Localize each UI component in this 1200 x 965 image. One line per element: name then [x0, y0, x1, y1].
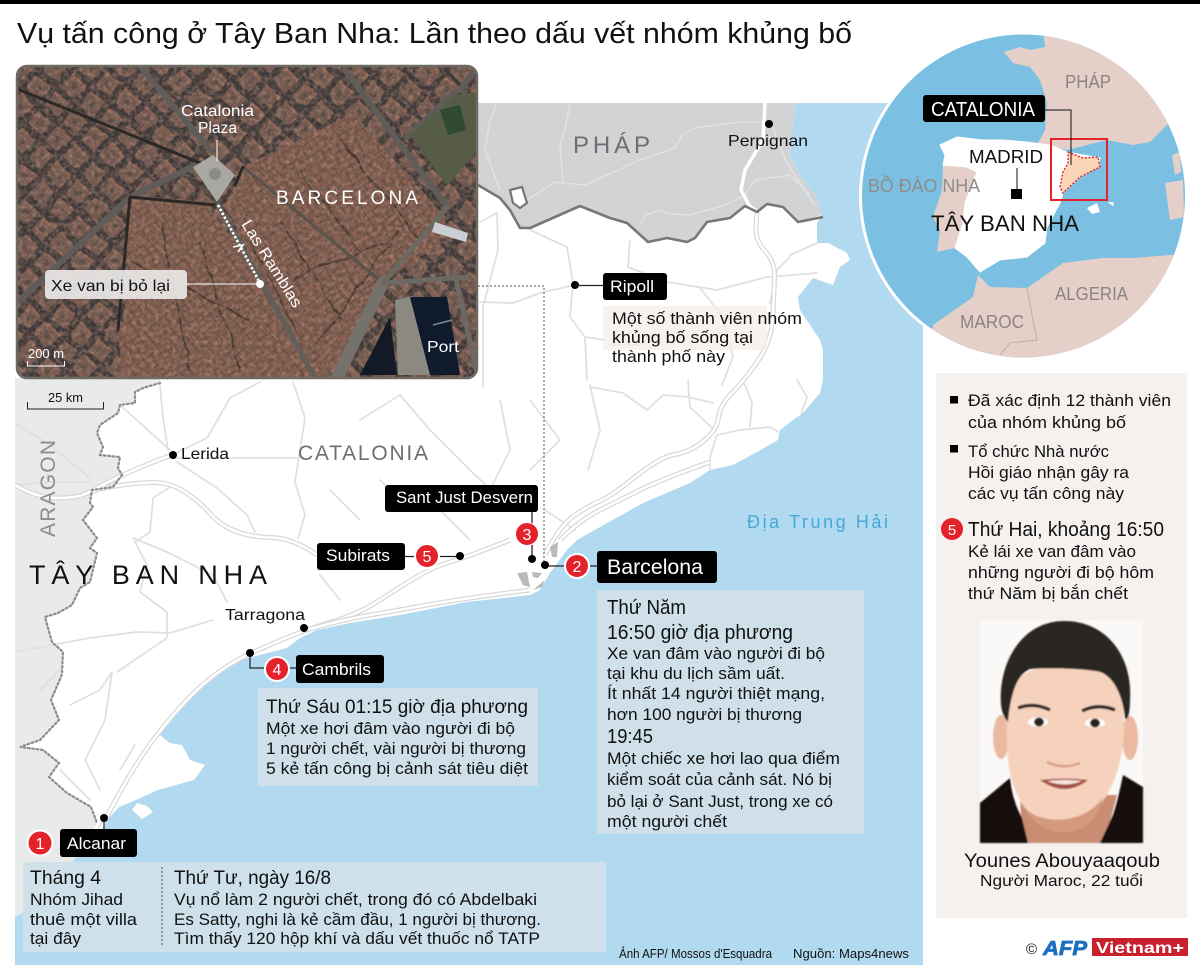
market roof — [432, 222, 468, 242]
neighbouring Spanish regions in grey — [15, 378, 160, 917]
logo: AFP and Vietnam+: © — [1026, 941, 1037, 958]
info box: Barcelona: Thứ Năm — [607, 597, 686, 619]
city: Tarragona — [225, 607, 308, 632]
info box: Barcelona: 16:50 giờ địa phương — [607, 622, 793, 644]
city: Lerida: Lerida — [181, 446, 229, 463]
Catalonia regional border — [20, 383, 160, 823]
attack 5 note: Kẻ lái xe van đâm vào — [968, 542, 1136, 561]
attack 5 note: thứ Năm bị bắn chết — [968, 584, 1128, 603]
title: Vụ tấn công ở Tây Ban Nha: Lần theo dấu vết nhóm khủng bố — [17, 18, 852, 50]
info box: Cambrils: 5 kẻ tấn công bị cảnh sát tiêu diệt — [266, 759, 528, 778]
info box: Alcanar: tại đây — [30, 929, 82, 948]
label: BỒ ĐÀO NHA: BỒ ĐÀO NHA — [868, 175, 980, 196]
marker: van abandoned — [45, 270, 264, 299]
map label: PHÁP: PHÁP — [573, 132, 650, 159]
location 4: Cambrils: Cambrils — [302, 661, 371, 679]
info box: Barcelona: bỏ lại ở Sant Just, trong xe có — [607, 792, 833, 811]
attack 5 note: Thứ Hai, khoảng 16:50 — [968, 519, 1164, 541]
info box: Alcanar: Vụ nổ làm 2 người chết, trong đó có Abdelbaki — [174, 890, 537, 909]
suspect portrait — [980, 620, 1143, 843]
info box: Alcanar: Thứ Tư, ngày 16/8 — [174, 868, 331, 889]
note: Ripoll: Một số thành viên nhóm — [612, 309, 802, 328]
white ring — [859, 32, 1188, 360]
city: Perpignan: Perpignan — [728, 133, 808, 150]
info box: Alcanar: Nhóm Jihad — [30, 890, 123, 909]
info box: Alcanar — [23, 862, 606, 952]
callout: CATALONIA — [923, 95, 1071, 165]
Balearic Islands — [1087, 203, 1100, 214]
port water — [395, 296, 432, 375]
North Africa — [932, 255, 1174, 358]
fact 2: Hồi giáo nhận gây ra — [968, 463, 1130, 482]
Perpignan white motorway — [741, 103, 765, 212]
Catalonia — [1060, 152, 1100, 193]
city: Tarragona: Tarragona — [225, 607, 305, 624]
info box: Barcelona: tại khu du lịch sầm uất. — [607, 664, 785, 683]
sea label: Địa Trung Hải: Địa Trung Hải — [747, 512, 888, 532]
note: Ripoll — [603, 306, 802, 366]
Morocco–Algeria border — [1000, 288, 1037, 355]
marker: van abandoned: Xe van bị bỏ lại — [51, 278, 170, 295]
map label: TÂY BAN NHA: TÂY BAN NHA — [29, 559, 267, 590]
location 5: Subirats: Subirats — [326, 547, 390, 565]
Portugal — [933, 165, 977, 252]
top black bar — [0, 0, 1200, 4]
Barcelona urban area — [517, 542, 558, 590]
locator sea — [860, 30, 1190, 360]
location 1: Alcanar: Alcanar — [67, 835, 127, 853]
info box: Barcelona: Một chiếc xe hơi lao qua điểm — [607, 749, 840, 768]
label: TÂY BAN NHA: TÂY BAN NHA — [931, 211, 1079, 236]
main map: Catalonia — [13, 103, 923, 965]
Ebro delta spit — [132, 803, 153, 819]
label: MAROC: MAROC — [960, 312, 1024, 332]
info box: Barcelona: một người chết — [607, 812, 727, 831]
Corsica and Sardinia — [1172, 152, 1181, 175]
logo: AFP and Vietnam+: Vietnam+ — [1096, 940, 1184, 957]
logo: AFP and Vietnam+ — [1026, 938, 1188, 960]
map label: CATALONIA: CATALONIA — [298, 442, 428, 465]
inset frame — [17, 66, 477, 378]
roads in Catalonia — [13, 213, 817, 800]
info box: Barcelona: Xe van đâm vào người đi bộ — [607, 644, 825, 663]
location 1: Alcanar — [28, 814, 137, 857]
note: Ripoll: thành phố này — [612, 347, 726, 366]
Andorra — [510, 187, 527, 208]
fact 2: các vụ tấn công này — [968, 484, 1125, 503]
scale bar: 200 m — [28, 347, 64, 366]
label: Catalonia Plaza — [181, 103, 254, 161]
info box: Alcanar: thuê một villa — [30, 910, 138, 929]
label: Catalonia Plaza: Catalonia — [181, 103, 254, 120]
location 1: Alcanar: 1 — [36, 836, 45, 853]
Spain — [940, 137, 1100, 272]
inset: satellite view of Barcelona — [6, 56, 488, 388]
info box: Cambrils: Thứ Sáu 01:15 giờ địa phương — [266, 697, 528, 718]
label: ALGERIA: ALGERIA — [1055, 284, 1128, 304]
location 3: Sant Just Desvern: Sant Just Desvern — [396, 489, 533, 507]
map label: ARAGON: ARAGON — [37, 440, 60, 537]
location 2: Barcelona: 2 — [573, 559, 582, 576]
label: PHÁP: PHÁP — [1065, 72, 1111, 92]
satellite imagery — [18, 67, 476, 377]
label: Port: Port — [427, 339, 460, 356]
land — [15, 103, 850, 917]
callout: CATALONIA: CATALONIA — [931, 99, 1036, 121]
label: Las Ramblas: Las Ramblas — [238, 217, 305, 311]
location 3: Sant Just Desvern — [385, 485, 538, 563]
fact 2: Tổ chức Nhà nước — [968, 442, 1109, 461]
photo credit: Ảnh AFP/ Mossos d'Esquadra — [619, 946, 772, 961]
attack 5 note — [941, 518, 1164, 603]
fact 1: Đã xác định 12 thành viên — [968, 391, 1171, 410]
info box: Barcelona — [597, 590, 864, 834]
location 4: Cambrils — [246, 649, 384, 683]
suspect details: Người Maroc, 22 tuổi — [980, 872, 1143, 890]
connector from inset to Barcelona — [478, 286, 544, 566]
capital: Madrid: MADRID — [969, 147, 1043, 167]
info box: Cambrils: Một xe hơi đâm vào người đi bộ — [266, 719, 515, 738]
locator map: Spain — [859, 30, 1200, 365]
location 2: Barcelona: Barcelona — [607, 556, 703, 579]
city: Perpignan — [728, 120, 808, 150]
info box: Alcanar: Tháng 4 — [30, 868, 101, 889]
info box: Barcelona: Ít nhất 14 người thiệt mạng, — [607, 684, 825, 703]
fact 1 — [950, 391, 1171, 432]
source: Nguồn: Maps4news — [793, 946, 909, 961]
info box: Barcelona: 19:45 — [607, 726, 653, 748]
label: Catalonia Plaza: Plaza — [198, 120, 237, 137]
regional highlight box — [1051, 139, 1107, 200]
panel: suspect and attack facts — [936, 373, 1187, 918]
sea — [15, 103, 923, 965]
Ciutadella park — [410, 92, 478, 186]
France and Italy — [1004, 36, 1168, 150]
label: BARCELONA: BARCELONA — [276, 188, 418, 209]
location: Ripoll: Ripoll — [610, 277, 654, 296]
France/Spain border — [478, 185, 823, 242]
fact 1: của nhóm khủng bố — [968, 413, 1127, 432]
Catalonia Plaza — [193, 155, 235, 202]
attack 5 note: 5 — [948, 522, 956, 539]
location 5: Subirats — [317, 543, 464, 570]
info box: Barcelona: kiểm soát của cảnh sát. Nó bị — [607, 770, 832, 789]
note: Ripoll: khủng bố sống tại — [612, 328, 753, 347]
scale bar: 25 km — [28, 390, 104, 409]
location 3: Sant Just Desvern: 3 — [523, 527, 532, 544]
scale bar: 25 km: 25 km — [48, 390, 83, 405]
scale bar: 200 m: 200 m — [28, 347, 64, 361]
capital: Madrid — [969, 147, 1043, 199]
motorways — [15, 212, 775, 830]
info box: Cambrils — [258, 688, 538, 786]
France in grey — [478, 103, 822, 242]
location 2: Barcelona — [541, 551, 717, 583]
suspect name: Younes Abouyaaqoub — [964, 851, 1160, 872]
info box: Alcanar: Es Satty, nghi là kẻ cầm đầu, 1 người bị thương. — [174, 910, 541, 929]
info box: Cambrils: 1 người chết, vài người bị thương — [266, 739, 526, 758]
location: Ripoll — [571, 273, 667, 300]
fact 2 — [950, 442, 1130, 503]
location 5: Subirats: 5 — [423, 549, 432, 566]
attack 5 note: những người đi bộ hôm — [968, 563, 1154, 582]
logo: AFP and Vietnam+: AFP — [1042, 938, 1088, 960]
roads in France — [485, 103, 815, 225]
location 4: Cambrils: 4 — [273, 662, 282, 679]
route arrow — [218, 205, 260, 283]
info box: Alcanar: Tìm thấy 120 hộp khí và dấu vết thuốc nổ TATP — [174, 929, 540, 948]
info box: Barcelona: hơn 100 người bị thương — [607, 705, 802, 724]
